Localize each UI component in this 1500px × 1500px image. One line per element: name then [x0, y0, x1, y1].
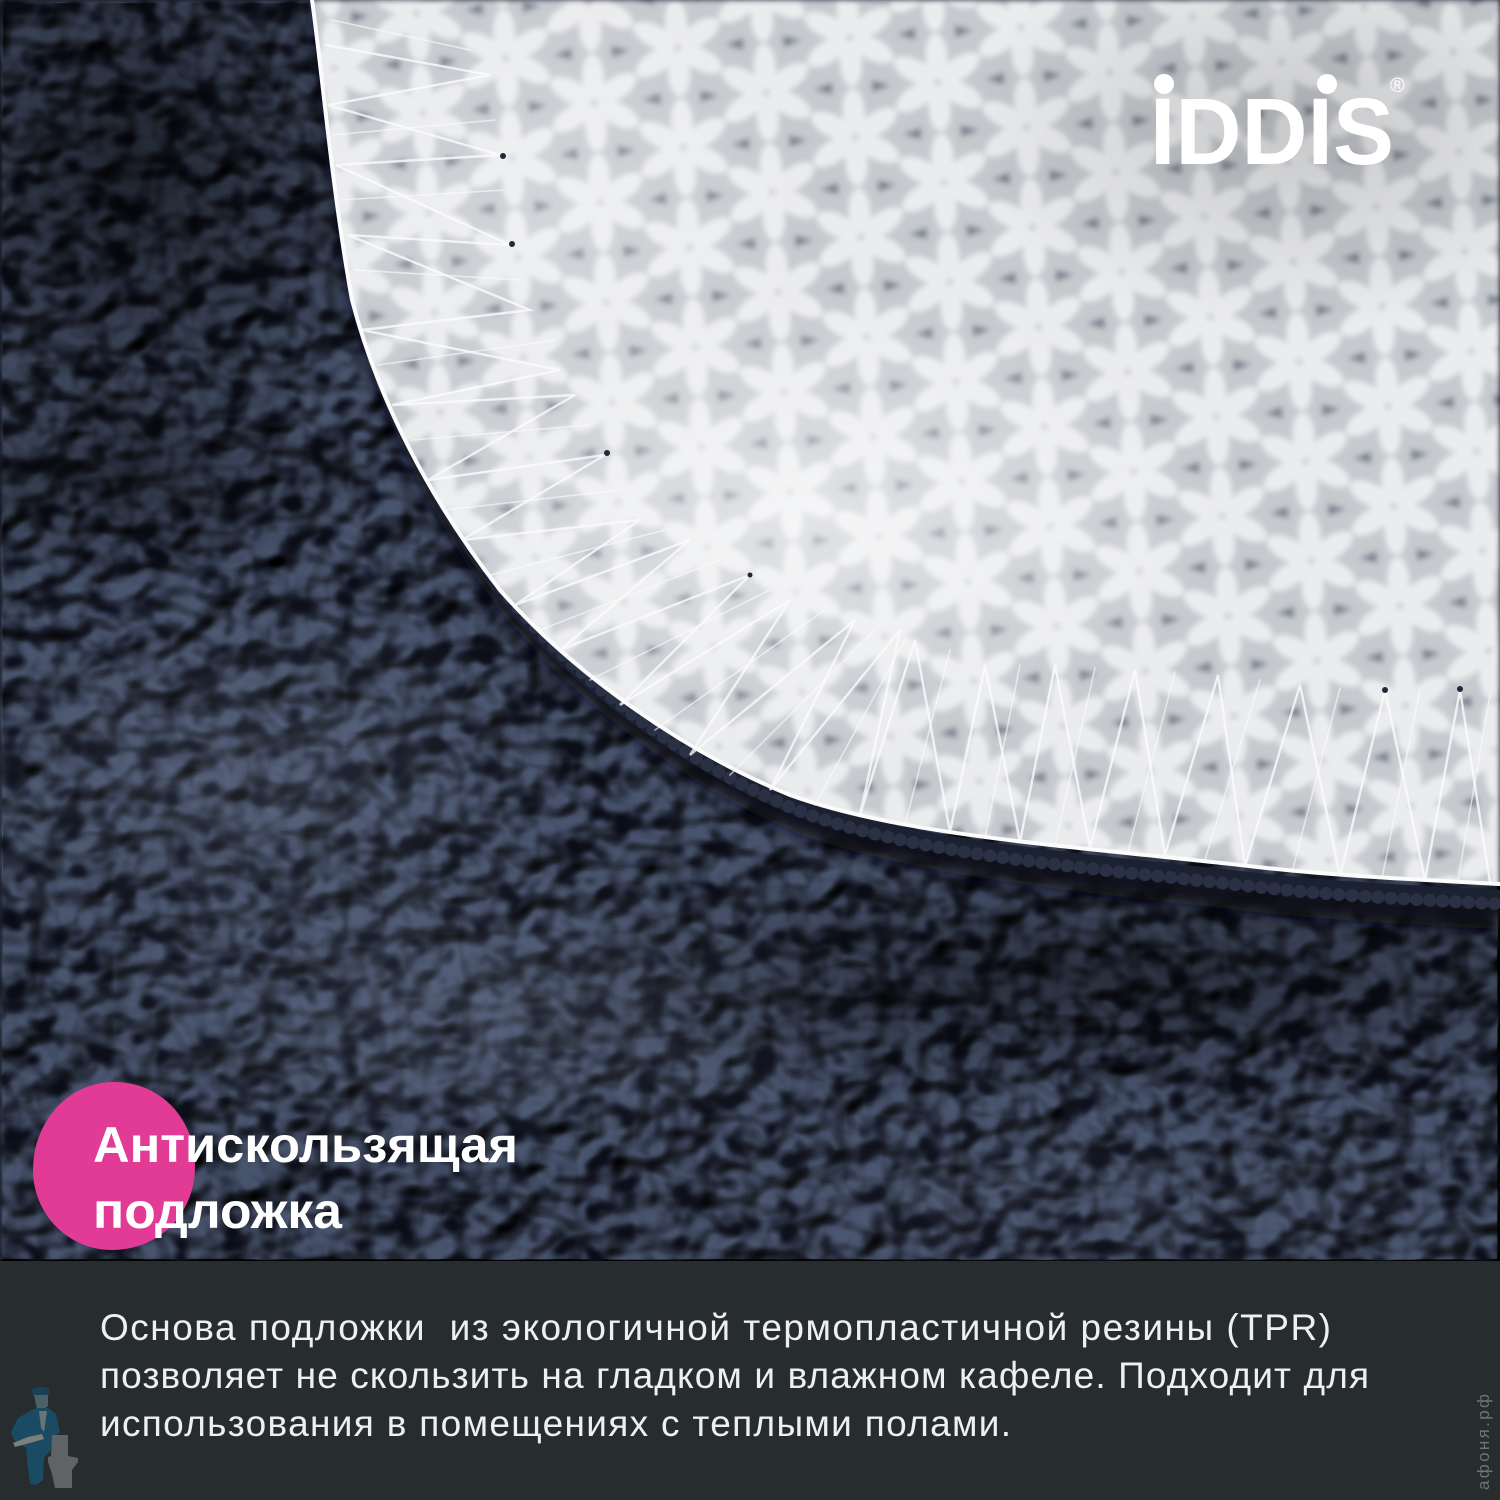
body text: позволяет не скользить на гладком и влажном кафеле. Подходит для	[100, 1355, 1369, 1396]
logo: IDDIS: ®	[1390, 75, 1405, 97]
pink accent blob	[33, 1082, 195, 1250]
logo: IDDIS: IDDIS	[1150, 79, 1394, 185]
watermark site name: афоня.рф	[1474, 1394, 1493, 1490]
mat edge shadow	[326, 0, 1500, 914]
body text: Основа подложки из экологичной термопластичной резины (TPR)	[100, 1307, 1331, 1348]
knitted dark rim around the backing	[320, 0, 1500, 904]
rubber anti-slip backing with star relief	[280, 0, 1500, 900]
white overlock stitching along the edge	[312, 0, 1500, 884]
heading: подложка	[93, 1183, 343, 1239]
stitch holes	[500, 153, 1463, 693]
heading: Антискользящая	[93, 1117, 518, 1173]
bottom text panel	[0, 1261, 1500, 1500]
icon: plumber with toilet watermark	[11, 1387, 78, 1488]
heading	[93, 1117, 518, 1239]
body text: использования в помещениях с теплыми полами.	[100, 1403, 1011, 1444]
body text	[100, 1307, 1369, 1444]
